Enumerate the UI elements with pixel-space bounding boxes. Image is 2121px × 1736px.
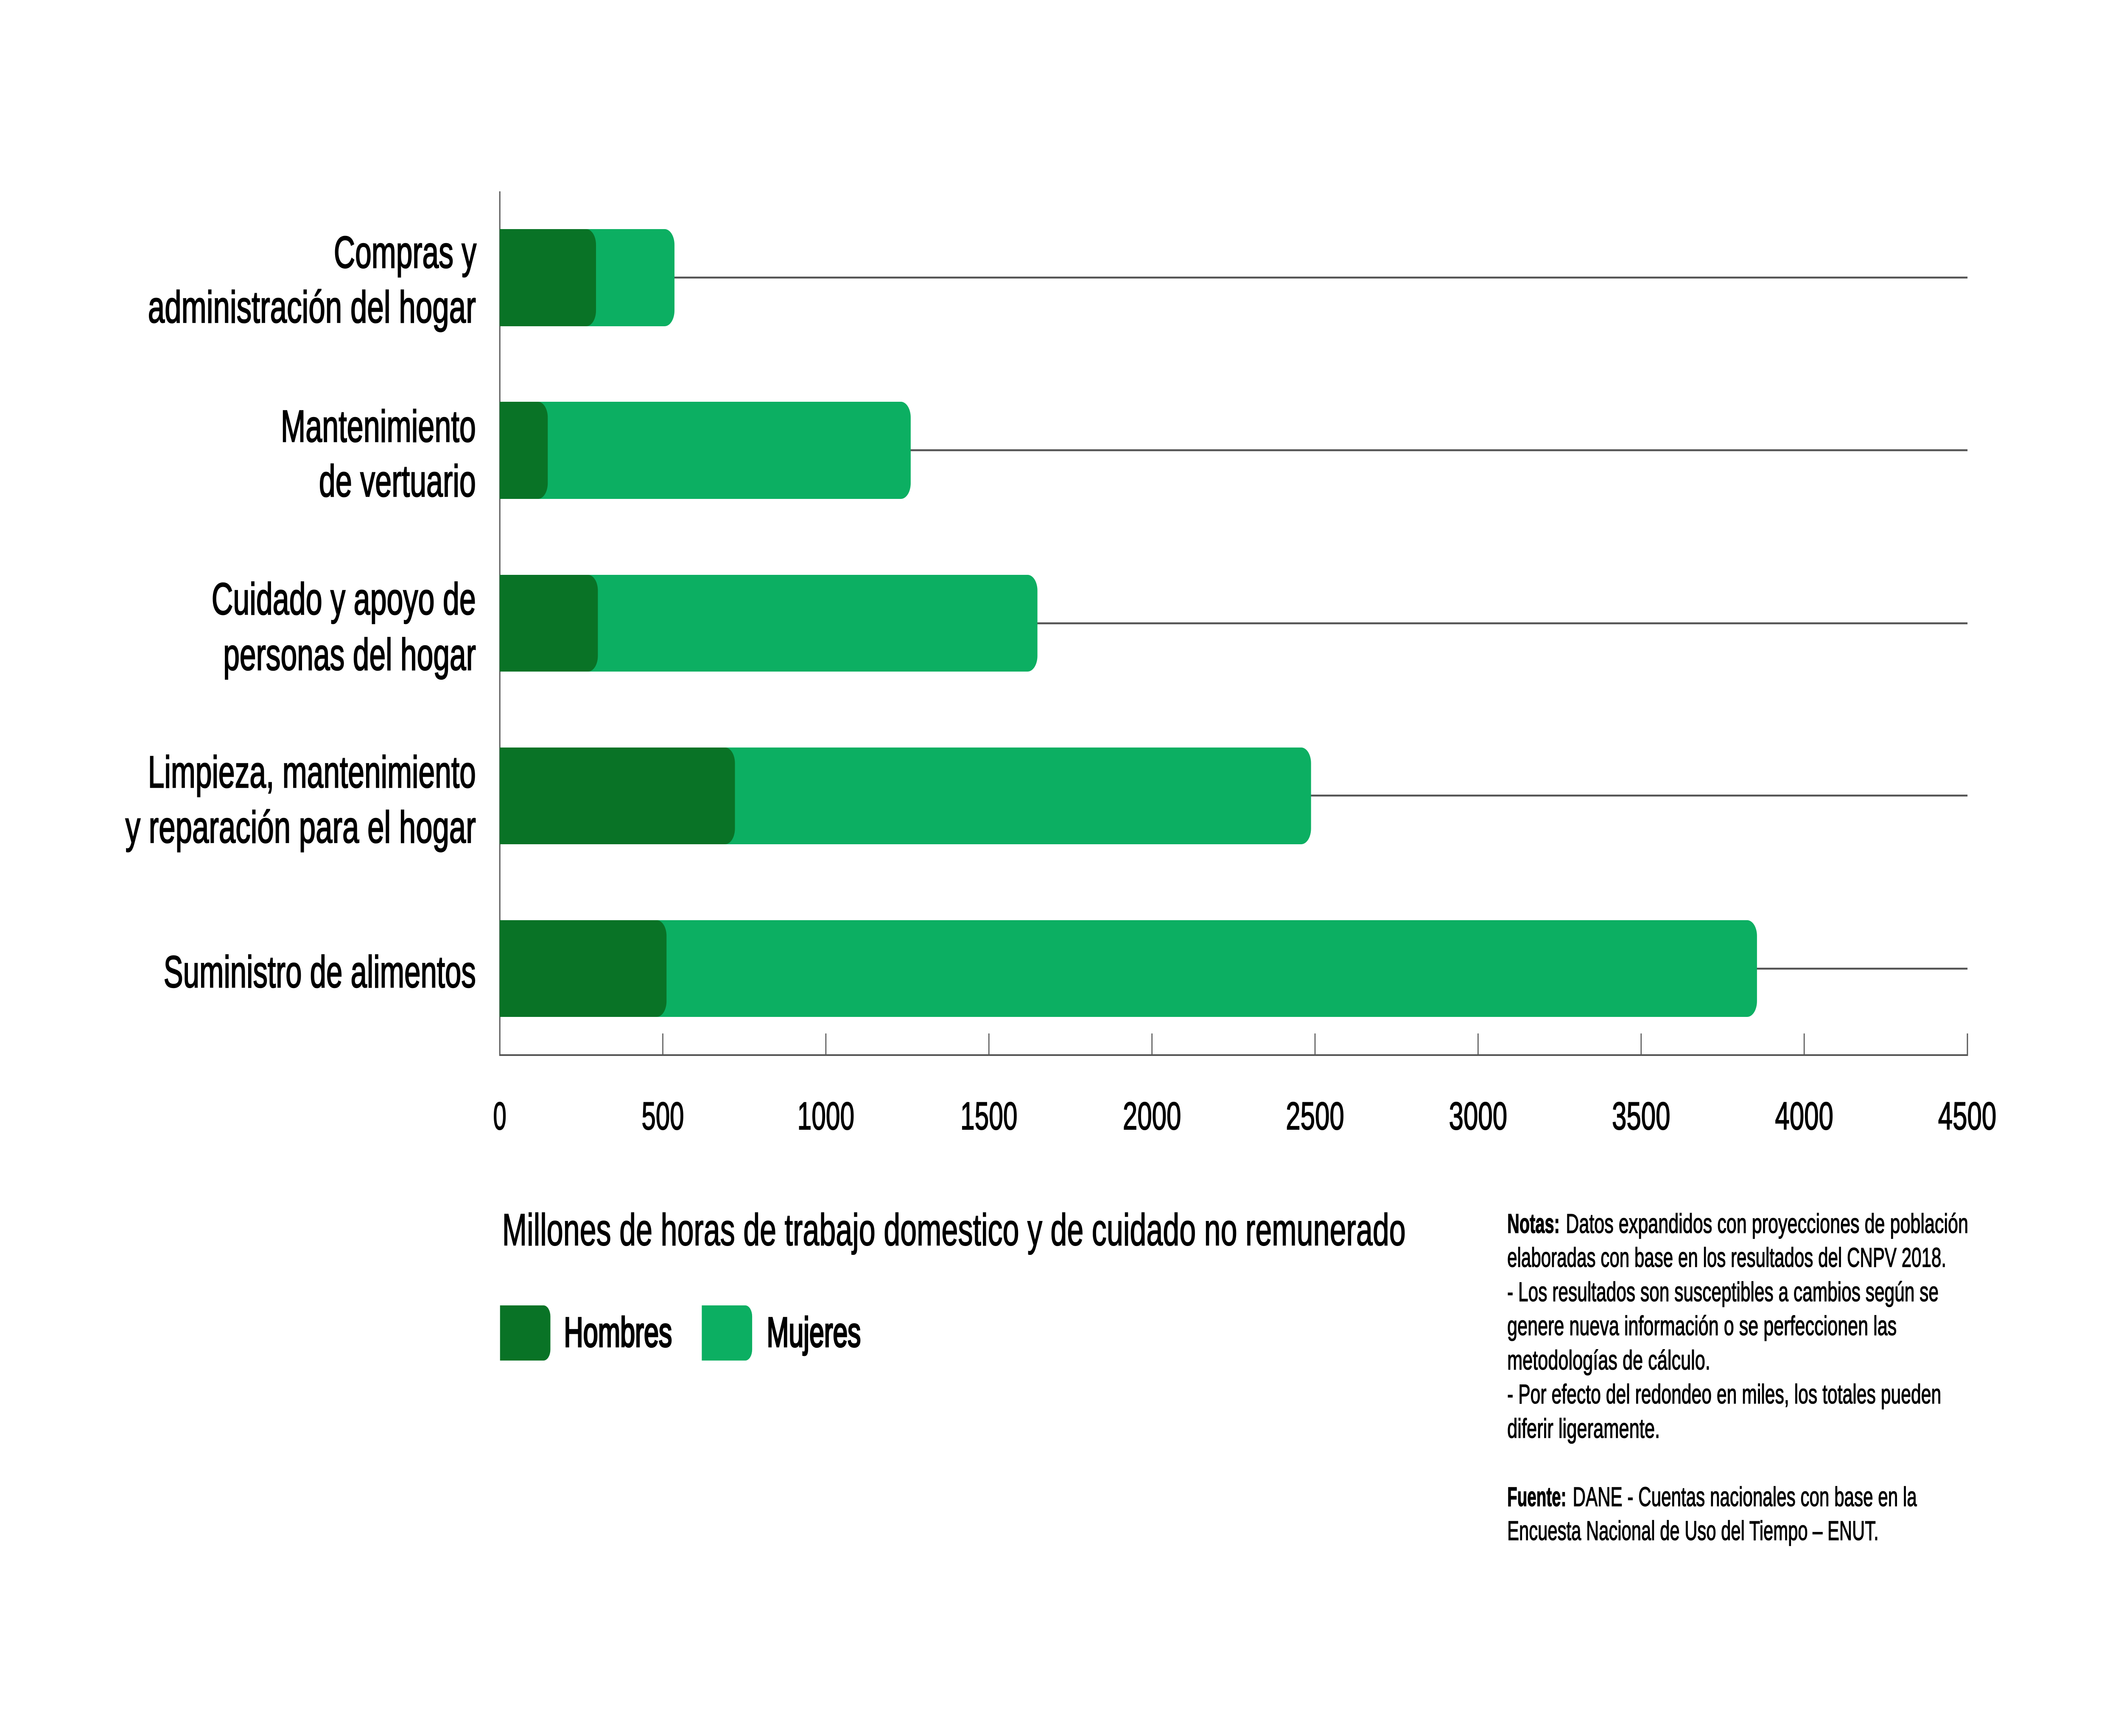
notes and source: diferir ligeramente. (1507, 1414, 1660, 1444)
axis title: Millones de horas de trabajo domestico y de cuidado no remunerado (502, 1204, 1406, 1255)
category labels: administración del hogar (148, 282, 476, 332)
notes and source: Notas: (1507, 1209, 1560, 1239)
chart axes and ticks (499, 191, 1968, 1056)
bar: Mantenimiento de vertuario (500, 402, 911, 499)
x axis tick labels: 2000 (1123, 1095, 1181, 1138)
category labels: Limpieza, mantenimiento (148, 747, 476, 797)
x axis tick labels: 0 (493, 1095, 506, 1138)
x axis tick labels: 500 (641, 1095, 684, 1138)
x axis tick labels: 4500 (1938, 1095, 1996, 1138)
x axis tick labels (493, 1095, 1996, 1138)
reference lines (500, 277, 1967, 970)
notes and source: - Los resultados son susceptibles a cambios según se (1507, 1277, 1939, 1307)
bar: Suministro de alimentos (500, 920, 1757, 1017)
bar: Cuidado y apoyo de personas del hogar (500, 575, 1038, 672)
category labels: y reparación para el hogar (126, 802, 476, 852)
bar: Limpieza, mantenimiento y reparación para el hogar (500, 748, 1311, 844)
category labels (126, 227, 477, 997)
category labels: Cuidado y apoyo de (212, 574, 476, 624)
notes and source: Encuesta Nacional de Uso del Tiempo – ENUT. (1507, 1516, 1879, 1546)
category labels: de vertuario (319, 456, 476, 506)
category labels: Suministro de alimentos (164, 946, 476, 997)
x axis tick labels: 1500 (960, 1095, 1017, 1138)
notes and source: Datos expandidos con proyecciones de población (1566, 1209, 1968, 1239)
notes and source: metodologías de cálculo. (1507, 1346, 1710, 1375)
x axis tick labels: 2500 (1286, 1095, 1344, 1138)
category labels: personas del hogar (223, 629, 476, 680)
legend swatch: Mujeres (702, 1305, 752, 1361)
notes and source: DANE - Cuentas nacionales con base en la (1573, 1482, 1917, 1512)
x axis tick labels: 4000 (1775, 1095, 1833, 1138)
notes and source (1507, 1209, 1968, 1546)
notes and source: genere nueva información o se perfeccionen las (1507, 1311, 1897, 1341)
category labels: Mantenimiento (281, 401, 476, 451)
legend label: Mujeres: Mujeres (767, 1309, 861, 1356)
legend label: Hombres: Hombres (564, 1309, 672, 1356)
category labels: Compras y (334, 227, 477, 277)
x axis tick labels: 1000 (797, 1095, 854, 1138)
legend (500, 1305, 861, 1361)
x axis tick labels: 3500 (1612, 1095, 1670, 1138)
notes and source: - Por efecto del redondeo en miles, los totales pueden (1507, 1380, 1941, 1409)
x axis tick labels: 3000 (1449, 1095, 1507, 1138)
notes and source: Fuente: (1507, 1482, 1566, 1512)
notes and source: elaboradas con base en los resultados del CNPV 2018. (1507, 1243, 1946, 1273)
legend swatch: Hombres (500, 1305, 551, 1361)
bar: Compras y administración del hogar (500, 229, 674, 326)
